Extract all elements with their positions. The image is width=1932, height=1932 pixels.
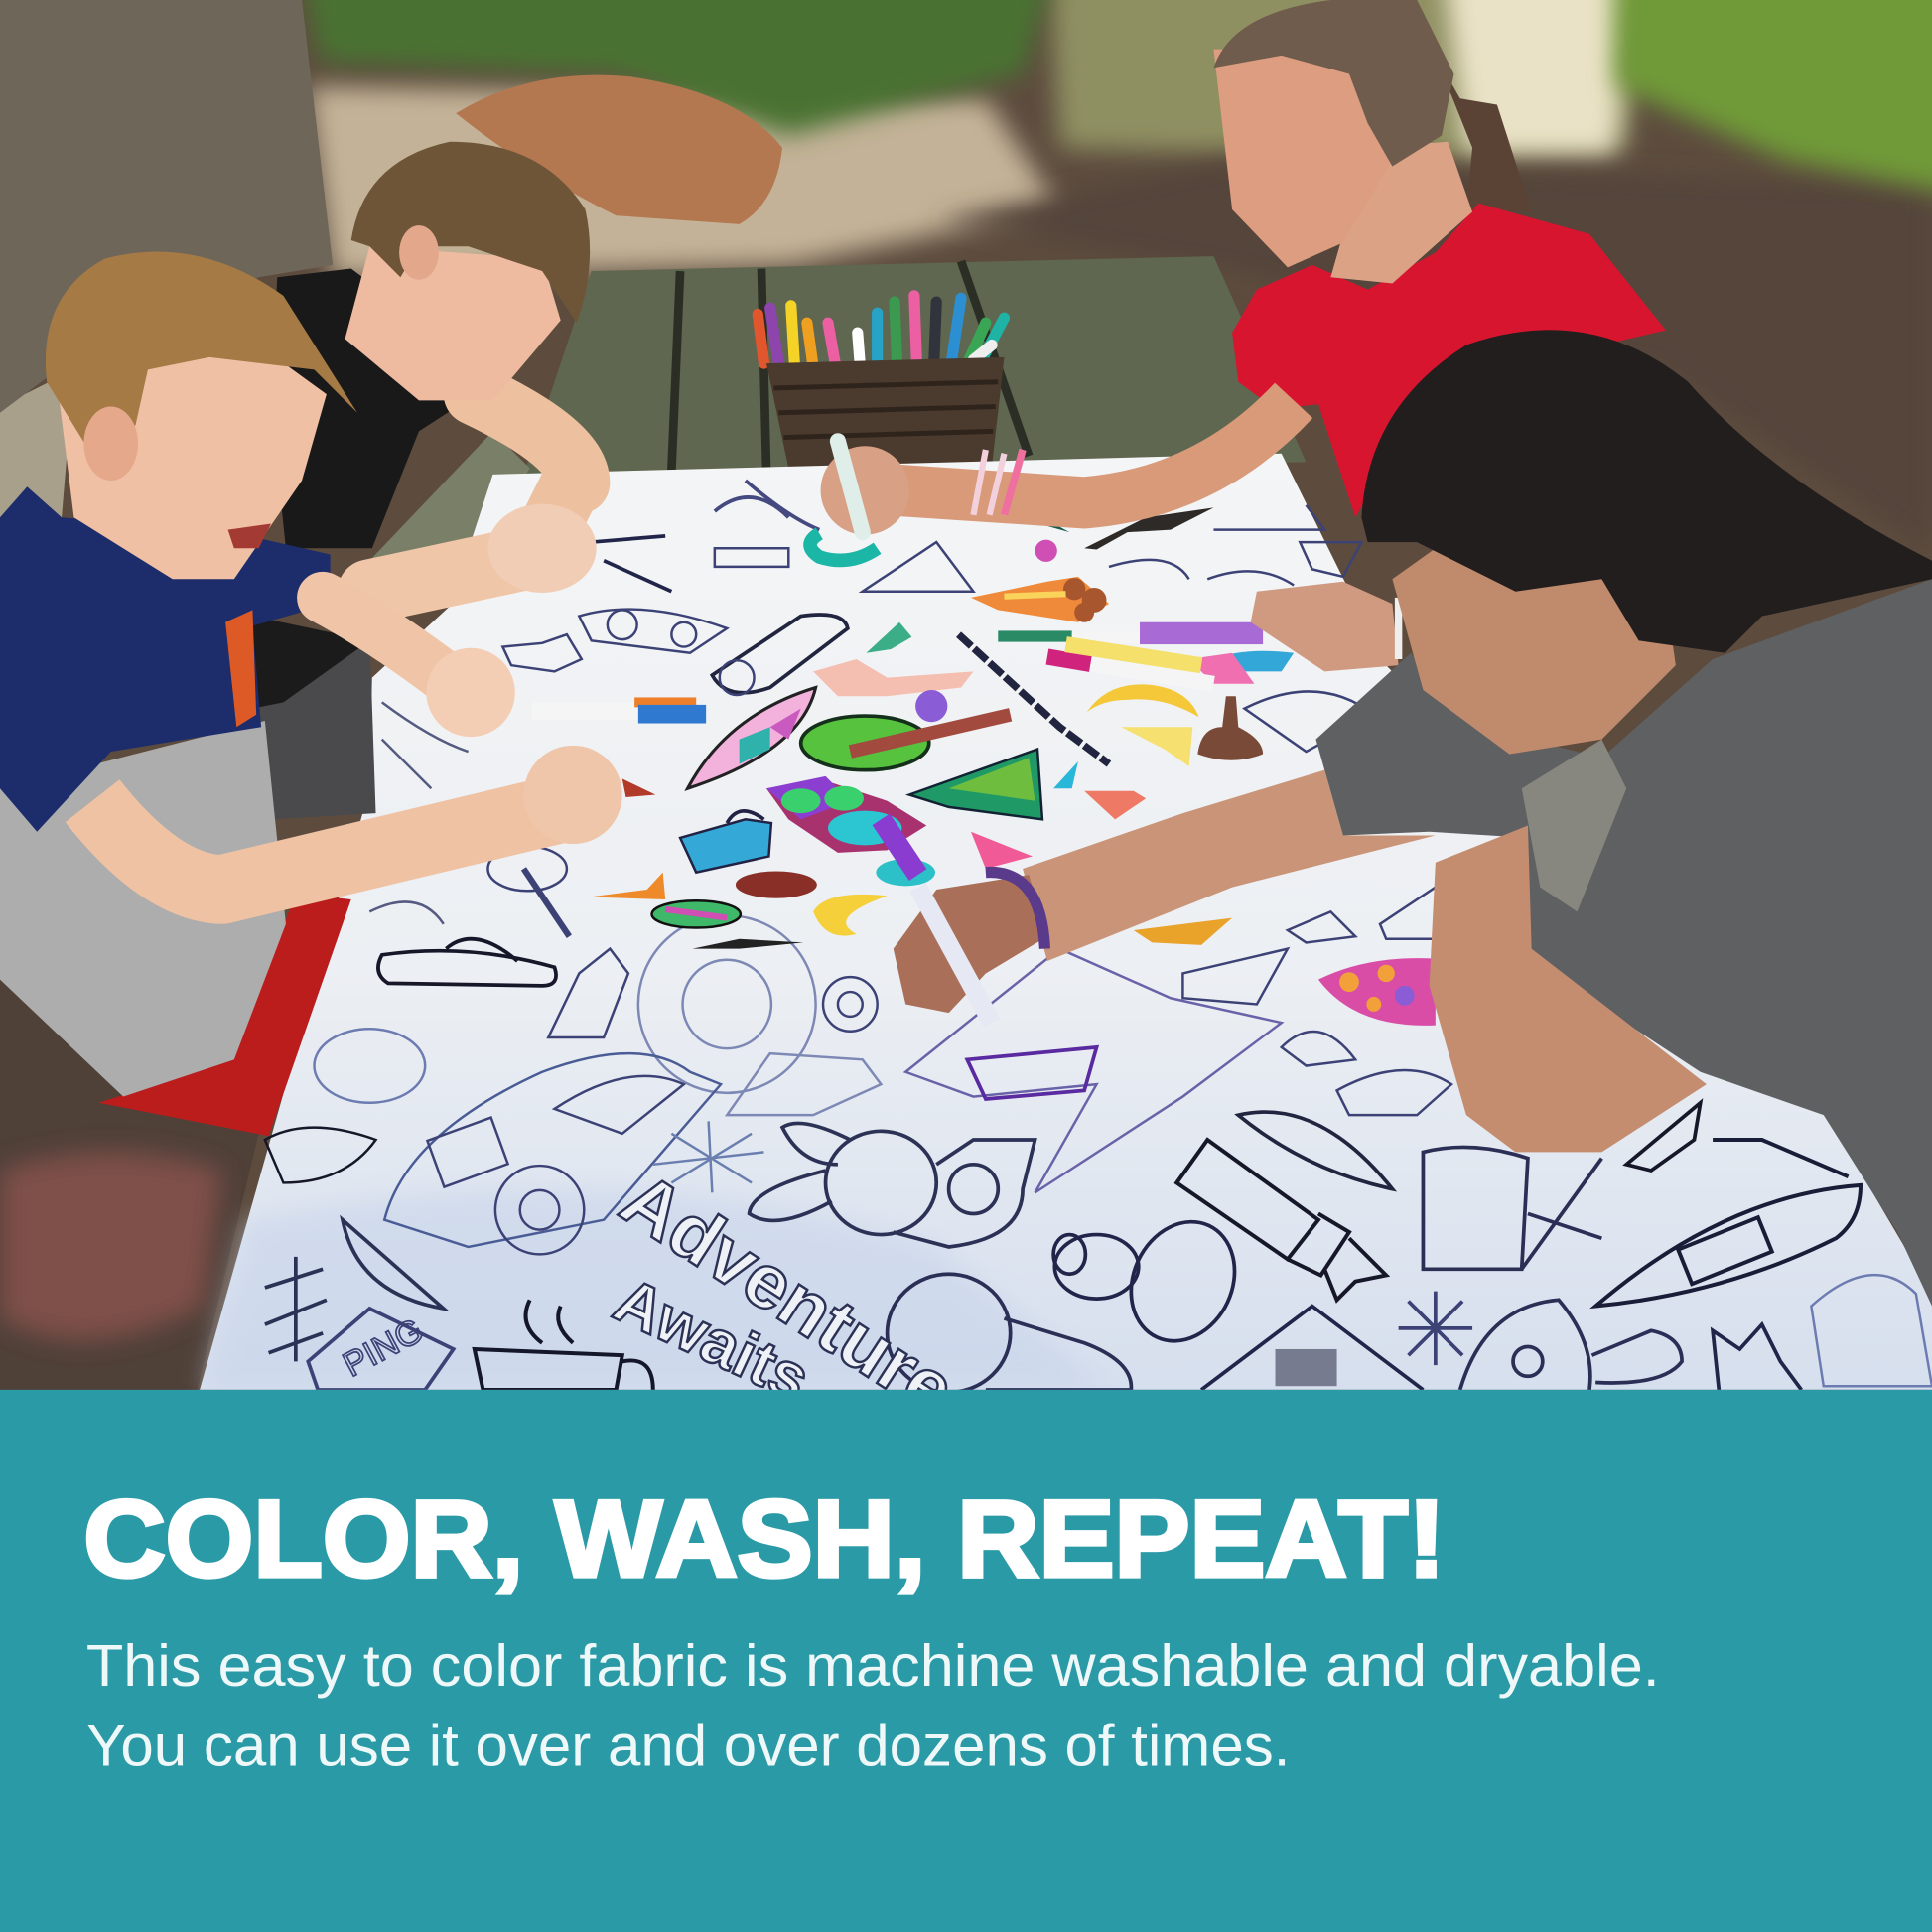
reaching arm bbox=[1023, 770, 1436, 961]
doodle: flashlight bbox=[1176, 1140, 1386, 1300]
doodle: cabin outline bbox=[905, 949, 1282, 1192]
doodle: mug bbox=[475, 1300, 653, 1390]
coloured doodle: fish bbox=[589, 873, 741, 928]
coloured doodle: pink flower bbox=[1035, 540, 1057, 562]
photo: family colouring a tablecloth outdoors bbox=[0, 0, 1932, 1434]
caption panel bbox=[0, 1390, 1932, 1932]
coloured doodle: fish skeleton bbox=[692, 939, 803, 949]
doodle: boot bbox=[727, 1053, 881, 1115]
coloured doodle: ukulele bbox=[1197, 696, 1263, 760]
coloured doodle: shovel bbox=[1084, 507, 1213, 550]
marker stack bbox=[1047, 644, 1213, 684]
coloured doodle: bird bbox=[1213, 651, 1294, 671]
coloured doodle: ball bbox=[876, 859, 935, 886]
doodle: star bbox=[502, 634, 582, 671]
coloured doodle: feather bbox=[1053, 761, 1078, 788]
doodle: flag tent bbox=[1201, 1307, 1423, 1390]
doodle: small outlines bbox=[1109, 505, 1374, 752]
doodle text: Adventure Awaits: Awaits bbox=[604, 1264, 820, 1416]
line-art doodles bbox=[265, 481, 1932, 1392]
coloured doodle: cardinal bbox=[1084, 791, 1146, 819]
marker group left bbox=[532, 697, 706, 724]
doodle: lantern bbox=[638, 915, 816, 1093]
coloured doodle: tent bbox=[909, 750, 1042, 819]
doodle: car wheels bbox=[314, 1029, 425, 1103]
doodle: canoe bbox=[1595, 1140, 1861, 1307]
doodle: fir branch bbox=[265, 1220, 444, 1361]
coloured doodle: sun bbox=[1134, 918, 1232, 945]
doodle: stones bbox=[1053, 1204, 1254, 1358]
coloured doodle: C letter bbox=[810, 533, 878, 560]
coloured doodle: big crescent bbox=[1087, 684, 1199, 717]
coloured doodle: surfboard bbox=[688, 688, 816, 788]
doodle: van bbox=[384, 1053, 721, 1247]
doodle: tent top bbox=[863, 542, 973, 592]
coloured doodle: mug bbox=[680, 811, 771, 873]
purple marker bbox=[881, 819, 992, 1023]
doodle: drum bbox=[1423, 1147, 1601, 1269]
hand with ring bbox=[1251, 582, 1399, 671]
person: woman in red shirt bbox=[821, 0, 1666, 671]
purple bracelet bbox=[986, 873, 1044, 949]
description text: This easy to color fabric is machine washable and dryable. bbox=[86, 1632, 1660, 1699]
coloured doodle: sleeping pet bbox=[813, 659, 973, 696]
doodle: small star bbox=[653, 1121, 763, 1192]
description text: You can use it over and over dozens of times. bbox=[86, 1712, 1290, 1778]
doodle: salt shaker bbox=[888, 1274, 1131, 1392]
doodle text: camping sign: PING bbox=[338, 1311, 429, 1385]
doodle: thermos bbox=[378, 951, 556, 986]
coloured doodles bbox=[589, 507, 1436, 1026]
wristbands bbox=[973, 450, 1023, 515]
doodle: guitar bbox=[523, 869, 569, 936]
basket of markers bbox=[758, 296, 1004, 469]
marker in hand bbox=[838, 441, 863, 532]
coloured doodle: acorn bbox=[736, 871, 817, 898]
doodle: spiky leaf bbox=[1713, 1324, 1801, 1390]
rock bbox=[456, 75, 782, 224]
doodle text: Adventure Awaits: Adventure bbox=[607, 1157, 970, 1434]
doodle: sleeping bag bbox=[712, 615, 848, 693]
markers on table bbox=[532, 622, 1263, 724]
doodle: leaf bbox=[1238, 1112, 1392, 1189]
tree trunk bbox=[0, 0, 333, 413]
doodle: mushroom bbox=[1460, 1300, 1682, 1390]
marker long green bbox=[998, 622, 1263, 644]
coloured doodle: tree bbox=[801, 715, 1011, 770]
coloured doodle: fir tree bbox=[866, 622, 911, 653]
cloth shadow band bbox=[204, 1188, 1109, 1390]
coloured doodle: owl bbox=[766, 776, 926, 853]
coloured doodle: fir leaf bbox=[1017, 517, 1069, 532]
folded arm bbox=[1430, 826, 1707, 1152]
doodle: bunny bbox=[750, 1123, 1035, 1247]
person: boy in blue shirt bbox=[0, 252, 622, 1136]
ground bbox=[0, 0, 1932, 1390]
bench bbox=[0, 973, 259, 1390]
doodle: camp stove bbox=[579, 610, 727, 653]
doodle: chain bbox=[959, 634, 1109, 763]
person: boy in black shirt bbox=[252, 142, 597, 819]
title: COLOR, WASH, REPEAT! bbox=[83, 1478, 1446, 1599]
coloured doodle: fan bbox=[1121, 727, 1192, 766]
coloured doodle: dark ice cream bbox=[622, 778, 655, 797]
foliage bbox=[296, 0, 1932, 198]
doodle: hedgehog bbox=[1811, 1275, 1932, 1386]
picnic table planks bbox=[371, 256, 1307, 558]
doodle: flower bbox=[1399, 1292, 1472, 1365]
tablecloth bbox=[200, 454, 1932, 1390]
description text bbox=[86, 1632, 1660, 1778]
coloured doodle: balloon egg bbox=[1318, 958, 1436, 1026]
doodle: camp sign bbox=[308, 1309, 454, 1390]
person: woman in grey shirt bbox=[881, 330, 1932, 1307]
coloured doodle: party hat bbox=[971, 832, 1033, 869]
coloured doodle: crescent moon bbox=[813, 895, 888, 936]
doodle: bottle bbox=[548, 949, 628, 1037]
coloured doodle: campfire bbox=[971, 577, 1109, 622]
coloured doodle: purple flower bbox=[915, 690, 947, 722]
